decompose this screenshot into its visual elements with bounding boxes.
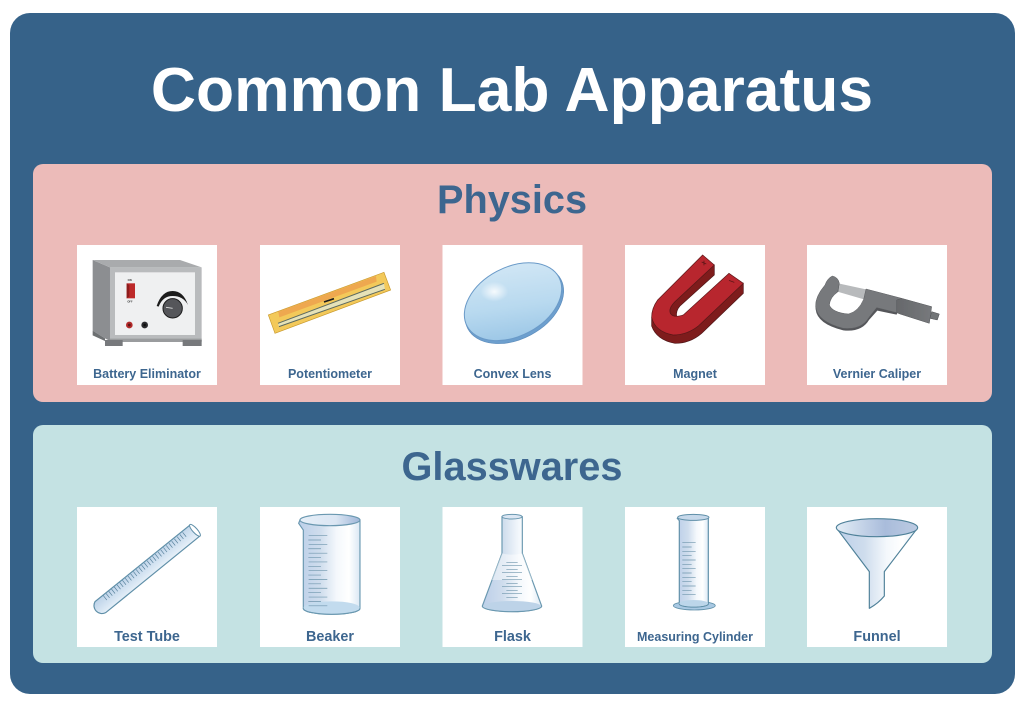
panel: physics [33, 164, 992, 402]
label: Vernier Caliper [833, 367, 921, 381]
label: Test Tube [114, 629, 180, 645]
card: magnet [625, 245, 765, 385]
card: flask [442, 507, 582, 647]
label: Beaker [306, 629, 354, 645]
card: convex lens [442, 245, 582, 385]
label: Magnet [673, 367, 718, 381]
icon: funnel [836, 519, 918, 608]
title: Common Lab Apparatus [151, 56, 873, 125]
icon: flask [482, 514, 542, 612]
label: Convex Lens [474, 367, 551, 381]
card: test tube [77, 507, 217, 647]
card: beaker [260, 507, 400, 647]
icon: potentiometer [268, 272, 391, 333]
label: Funnel [853, 629, 901, 645]
heading: physics: Physics [437, 178, 587, 222]
heading: glasswares: Glasswares [402, 445, 622, 489]
card: funnel [807, 507, 947, 647]
icon: battery eliminator [93, 260, 202, 346]
icon: beaker [299, 514, 360, 614]
card: vernier caliper [807, 245, 947, 385]
icon: vernier caliper [816, 276, 939, 331]
card: battery eliminator [77, 245, 217, 385]
panel: glasswares [33, 425, 992, 663]
label: Potentiometer [288, 367, 372, 381]
icon: battery eliminator: OFF [127, 300, 133, 304]
icon: measuring cylinder [673, 514, 715, 610]
icon: magnet [652, 255, 743, 343]
card: potentiometer [260, 245, 400, 385]
icon: battery eliminator: ON [128, 278, 132, 282]
icon: test tube [94, 523, 202, 614]
label: Measuring Cylinder [637, 630, 753, 644]
card: measuring cylinder [625, 507, 765, 647]
label: Battery Eliminator [93, 367, 201, 381]
label: Flask [494, 629, 532, 645]
icon: convex lens [451, 247, 577, 360]
